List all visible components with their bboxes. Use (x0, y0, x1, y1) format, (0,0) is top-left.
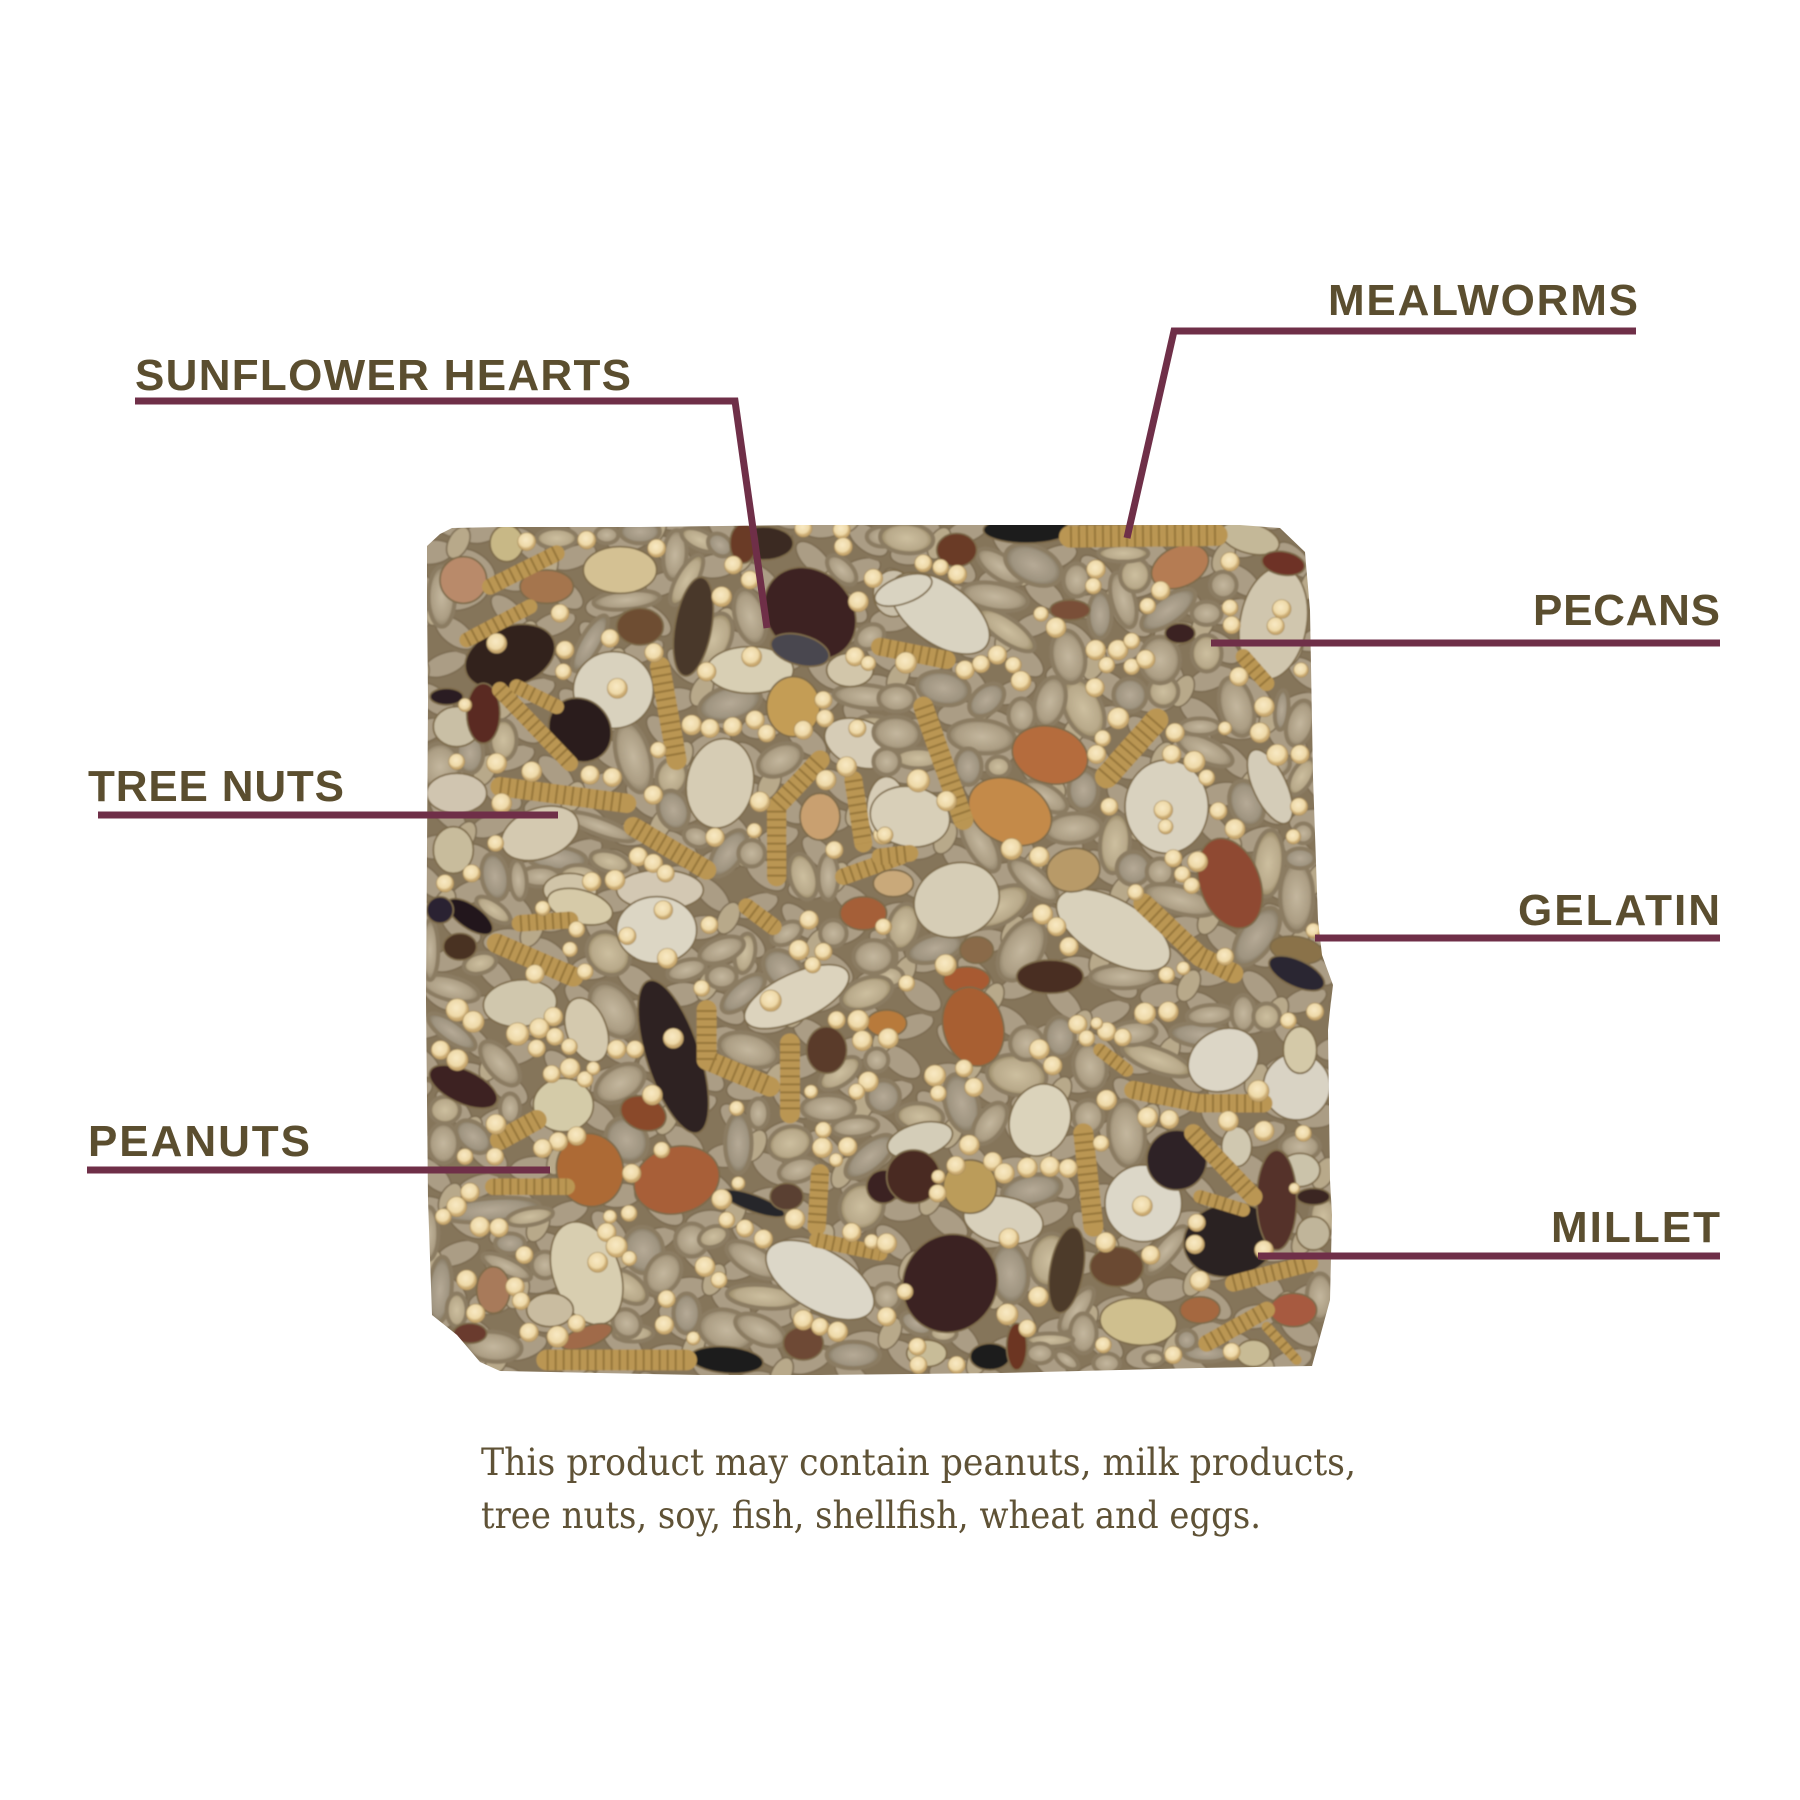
allergen note: This product may contain peanuts, milk products, (481, 1441, 1356, 1484)
ingredient bar (418, 515, 1350, 1385)
callout: pecans: PECANS (1533, 586, 1720, 635)
bar region: bottom left (418, 882, 907, 1376)
callout: gelatin: GELATIN (1518, 886, 1720, 935)
allergen note (481, 1441, 1356, 1537)
bar region: top left (420, 520, 913, 910)
callout: sunflower hearts (135, 351, 767, 628)
callout: millet: MILLET (1551, 1203, 1720, 1252)
callout: mealworms (1127, 276, 1638, 538)
callout: mealworms: MEALWORMS (1328, 276, 1638, 325)
callout: tree nuts: TREE NUTS (88, 762, 344, 811)
callout: peanuts: PEANUTS (88, 1117, 310, 1166)
bar region: top right (865, 516, 1329, 998)
bar region: bottom right (883, 980, 1337, 1374)
callout: sunflower hearts: SUNFLOWER HEARTS (135, 351, 631, 400)
allergen note: tree nuts, soy, fish, shellfish, wheat and eggs. (481, 1494, 1261, 1537)
infographic canvas (87, 284, 1720, 1536)
